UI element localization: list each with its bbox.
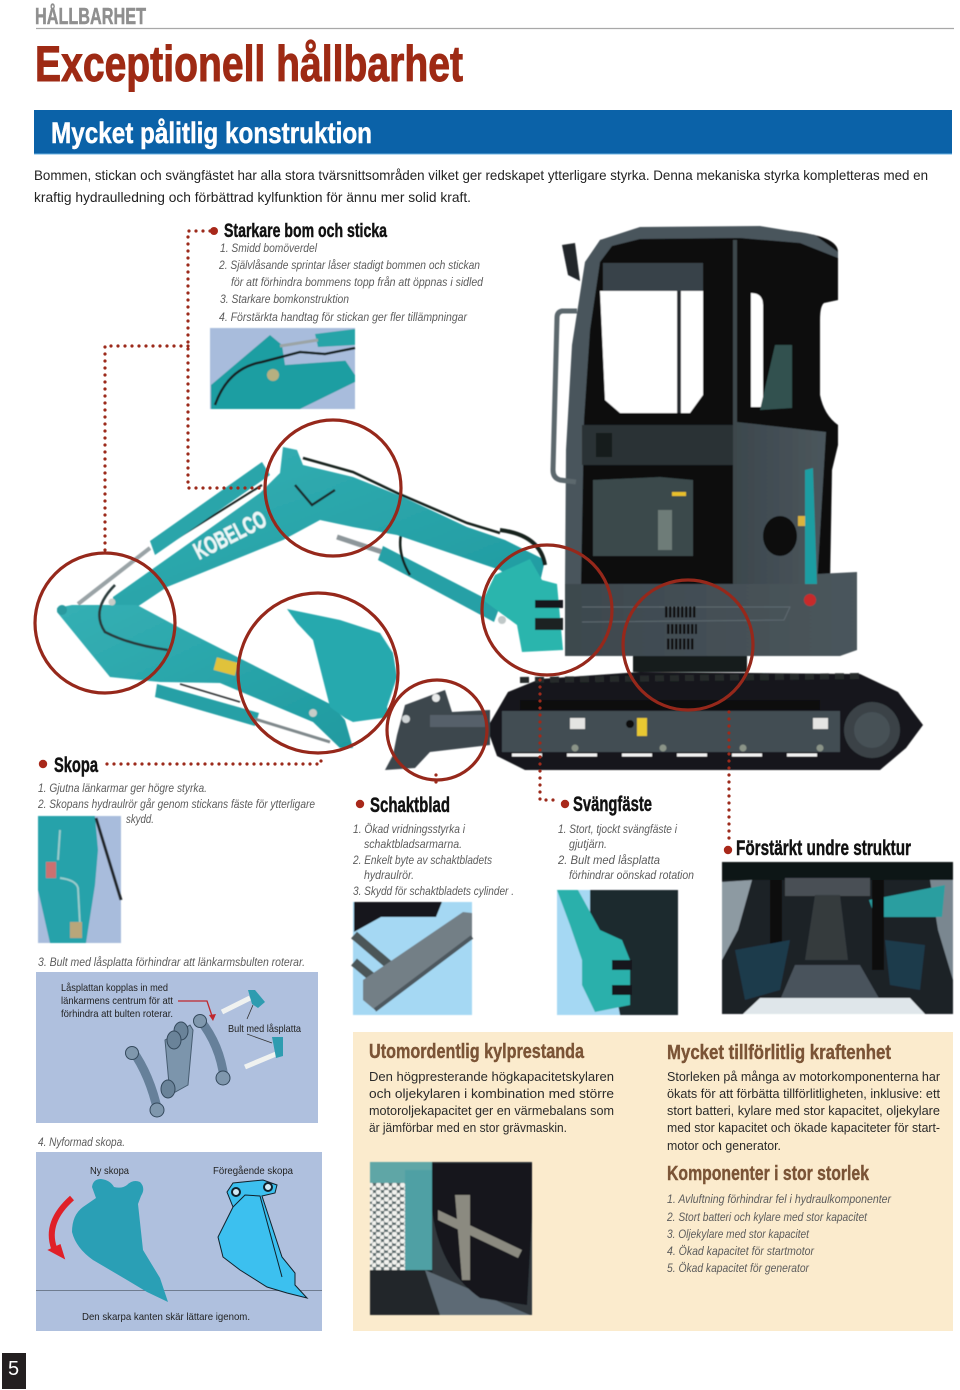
callout: Svängfäste: gjutjärn. (569, 837, 607, 851)
callout: Skopa: 2. Skopans hydraulrör går genom stickans fäste för ytterligare (37, 797, 315, 811)
callout: Starkare bom och sticka: Starkare bom och sticka (224, 221, 387, 242)
heading: power unit: Mycket tillförlitlig kraftenhet (667, 1042, 891, 1064)
section label: HÅLLBARHET (35, 2, 146, 29)
callout: Starkare bom och sticka: 2. Självlåsande sprintar låser stadigt bommen och stickan (218, 258, 480, 272)
callout: Schaktblad: hydraulrör. (364, 868, 414, 882)
intro text: Bommen, stickan och svängfästet har alla stora tvärsnittsområden vilket ger redskapet ytterligare styrka. Denna mekaniska styrka kompletteras med en (34, 167, 928, 183)
panel: bucket comparison: Föregående skopa (213, 1165, 293, 1177)
photo: undercarriage (722, 862, 953, 1014)
callout: Svängfäste: förhindrar oönskad rotation (569, 868, 694, 882)
panel: lock plate diagram (36, 972, 318, 1123)
callout: Schaktblad: schaktbladsarmarna. (364, 837, 462, 851)
dotted leader lines (105, 231, 729, 842)
callout: Starkare bom och sticka: 4. Förstärkta handtag för stickan ger fler tillämpningar (219, 310, 468, 324)
page number: 5 (8, 1358, 19, 1380)
list: components: 1. Avluftning förhindrar fel i hydraulkomponenter (667, 1192, 892, 1206)
callout: Schaktblad: 1. Ökad vridningsstyrka i (353, 822, 465, 836)
rotation arrow (49, 1198, 72, 1258)
photo: dozer blade (353, 902, 472, 1015)
callout: Schaktblad (352, 794, 514, 898)
panel: bucket comparison: Ny skopa (90, 1165, 129, 1177)
intro text (34, 167, 928, 205)
intro text: kraftig hydraulledning och förbättrad kylfunktion för ännu mer solid kraft. (34, 189, 471, 205)
panel: bucket comparison: Den skarpa kanten skär lättare igenom. (82, 1311, 250, 1323)
callout: Skopa: skydd. (126, 812, 154, 826)
blue heading bar: Mycket pålitlig konstruktion (51, 117, 372, 150)
callout: Svängfäste: Svängfäste (573, 793, 652, 816)
callout: Starkare bom och sticka: 3. Starkare bomkonstruktion (220, 292, 349, 306)
photo: bucket hose (38, 816, 121, 943)
text: power unit: motor och generator. (667, 1138, 781, 1153)
arm cylinder (78, 462, 270, 604)
list: components (666, 1192, 892, 1275)
panel: lock plate diagram: förhindra att bulten roterar. (61, 1008, 173, 1020)
callout: Starkare bom och sticka: 1. Smidd bomöverdel (220, 241, 317, 255)
new bucket (72, 1179, 168, 1302)
text: power unit: med stor kapacitet och ökade kapaciteter för start- (667, 1120, 940, 1135)
title: Exceptionell hållbarhet (35, 36, 463, 92)
panel: bucket comparison (36, 1152, 322, 1331)
list: components: 2. Stort batteri och kylare med stor kapacitet (666, 1210, 868, 1224)
callout: Schaktblad: 2. Enkelt byte av schaktbladets (352, 853, 492, 867)
list: components: 5. Ökad kapacitet för generator (667, 1261, 810, 1275)
photo: boom joint (210, 328, 355, 409)
panel: lock plate diagram: Låsplattan kopplas in med (61, 982, 168, 994)
panel: lock plate diagram: Bult med låsplatta (228, 1023, 301, 1035)
page number (2, 1353, 26, 1389)
old bucket (218, 1180, 307, 1298)
photo: cooler (370, 1162, 532, 1315)
text: cooling: är jämförbar med en stor grävmaskin. (369, 1120, 567, 1135)
item 4 caption: 4. Nyformad skopa. (38, 1135, 125, 1149)
callout: Starkare bom och sticka: för att förhindra bommens topp från att öppnas i sidled (231, 275, 483, 289)
text: power unit: Storleken på många av motorkomponenterna har (667, 1069, 941, 1084)
callout: Schaktblad: Schaktblad (370, 794, 450, 817)
panel: lock plate diagram: länkarmens centrum för att (61, 995, 173, 1007)
cab (553, 226, 838, 585)
list: components: 3. Oljekylare med stor kapacitet (667, 1227, 810, 1241)
dozer blade bracket (385, 690, 490, 770)
panel: cooling and power (353, 1032, 953, 1331)
track (487, 672, 923, 770)
heading: components: Komponenter i stor storlek (667, 1163, 870, 1185)
machine body (565, 572, 857, 672)
text: cooling (369, 1069, 614, 1135)
list: components: 4. Ökad kapacitet för startmotor (667, 1244, 815, 1258)
text: cooling: och oljekylaren i kombination med större (369, 1086, 614, 1101)
callout: Starkare bom och sticka (210, 221, 483, 324)
callout: Svängfäste (557, 793, 694, 882)
boom: KOBELCO (189, 506, 271, 565)
callout: Svängfäste: 2. Bult med låsplatta (557, 853, 660, 867)
excavator illustration (57, 226, 923, 770)
highlight circles (35, 420, 753, 780)
arm (57, 585, 353, 748)
boom (113, 447, 545, 610)
text: cooling: Den högpresterande högkapacitetskylaren (369, 1069, 614, 1084)
swing bracket (483, 559, 563, 652)
bucket cylinder (155, 684, 330, 742)
vents (665, 612, 697, 644)
text: power unit: ökats för att förbätta tillförlitligheten, inklusive: ett (667, 1086, 940, 1101)
boom cylinder (337, 518, 500, 622)
blue heading bar (34, 110, 952, 154)
text: power unit (667, 1069, 941, 1153)
bucket (287, 609, 397, 722)
text: cooling: motoroljekapacitet ger en värmebalans som (369, 1103, 614, 1118)
text: power unit: stort batteri, kylare med stor kapacitet, oljekylare (667, 1103, 940, 1118)
callout: Skopa: 1. Gjutna länkarmar ger högre styrka. (38, 781, 207, 795)
photo: swing bracket (557, 890, 678, 1015)
callout: Schaktblad: 3. Skydd för schaktbladets cylinder . (353, 884, 514, 898)
callout: Svängfäste: 1. Stort, tjockt svängfäste i (558, 822, 677, 836)
item 3 caption: 3. Bult med låsplatta förhindrar att länkarmsbulten roterar. (38, 955, 305, 969)
callout: Skopa: Skopa (54, 754, 98, 777)
heading: cooling: Utomordentlig kylprestanda (369, 1041, 585, 1063)
callout: Skopa (37, 754, 315, 826)
